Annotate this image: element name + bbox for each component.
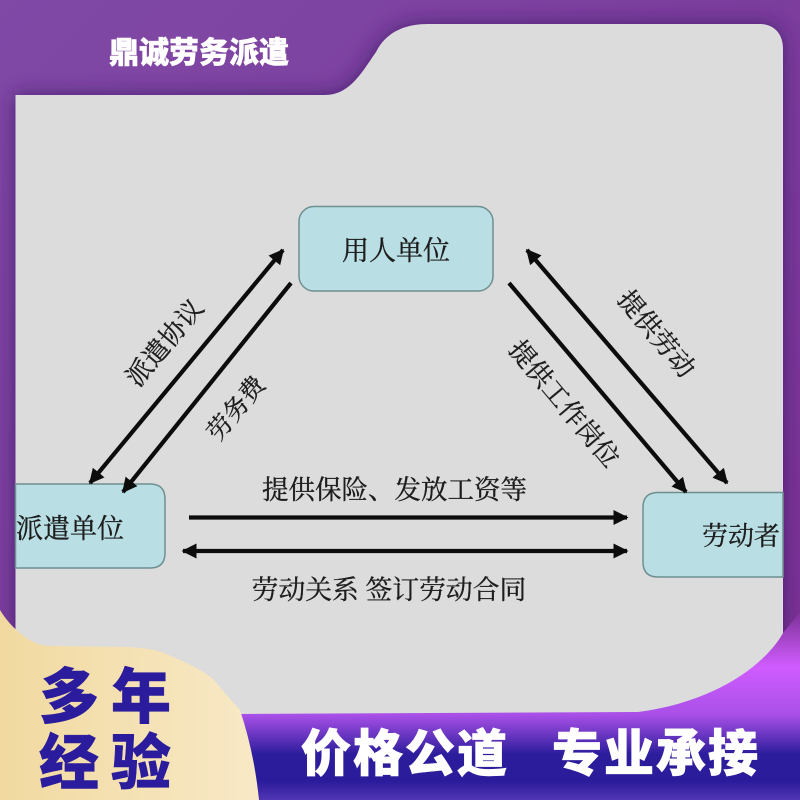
arrow: 派遣协议 double arrow bbox=[90, 250, 283, 483]
node: 用人单位: 用人单位 bbox=[342, 236, 450, 266]
label: 提供保险、发放工资等: 提供保险、发放工资等 bbox=[262, 475, 527, 505]
slogan: 价格公道 专业承接 bbox=[301, 726, 760, 782]
node: 派遣单位 bbox=[16, 484, 165, 568]
arrow: 提供劳动 double arrow bbox=[527, 250, 727, 483]
label: 提供工作岗位: 提供工作岗位 bbox=[503, 335, 625, 473]
slogan: 价格公道 专业承接: 专业承接 bbox=[552, 726, 760, 782]
arrow: 劳务费 bbox=[123, 283, 291, 492]
slogan: 价格公道 专业承接: 价格公道 bbox=[301, 726, 509, 782]
bottom band bbox=[240, 612, 800, 800]
arrow: 劳动关系 double arrow bbox=[183, 549, 627, 553]
badge text: 多年经验 bbox=[39, 664, 183, 797]
badge text: 多年经验: 多年 bbox=[39, 664, 183, 731]
arrow: 提供保险 bbox=[189, 515, 627, 520]
node: 劳动者 bbox=[643, 492, 783, 577]
cream badge bbox=[0, 610, 259, 800]
node: 派遣单位: 派遣单位 bbox=[16, 514, 124, 544]
label: 劳动关系 签订劳动合同: 劳动关系 签订劳动合同 bbox=[252, 575, 526, 605]
badge text: 多年经验: 经验 bbox=[39, 730, 183, 797]
node: 用人单位 bbox=[299, 206, 493, 291]
label: 提供劳动: 提供劳动 bbox=[611, 285, 701, 383]
title: 鼎诚劳务派遣 bbox=[109, 37, 289, 70]
panel shadow bbox=[15, 24, 783, 640]
label: 劳务费: 劳务费 bbox=[202, 370, 272, 446]
node: 劳动者: 劳动者 bbox=[702, 522, 780, 551]
label: 派遣协议: 派遣协议 bbox=[120, 294, 210, 392]
arrow: 提供工作岗位 bbox=[509, 283, 686, 492]
